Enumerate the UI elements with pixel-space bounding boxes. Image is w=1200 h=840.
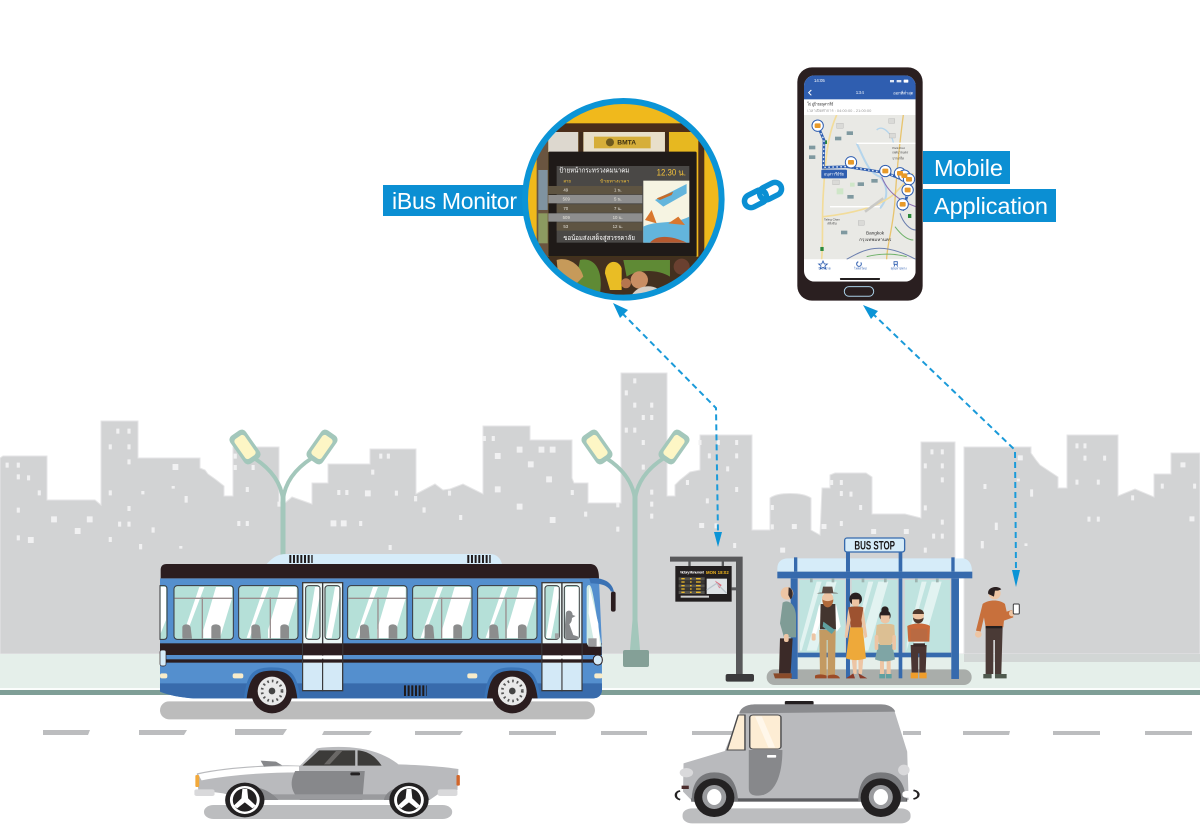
route map: Taling Chan [824, 218, 840, 222]
front door of bus [303, 583, 343, 691]
screen map [643, 181, 689, 243]
monitor screen: สาย [563, 178, 571, 183]
monitor screen: 12.30 น. [657, 168, 686, 178]
sign screen: Victory Monument [680, 570, 705, 574]
route map [804, 115, 916, 259]
street lamp 1 [227, 428, 340, 560]
bus lights and vent [160, 650, 603, 691]
route map: Bangkok [866, 231, 885, 236]
icon: chain link [742, 180, 784, 210]
car wheels [225, 783, 429, 817]
phone screen [804, 75, 916, 282]
passengers at bus stop [773, 587, 1019, 678]
street lamp 2 [579, 428, 692, 667]
person: man with phone [975, 587, 1019, 678]
app header: ไป อู่ป้ายอนุสาวรีย์ [807, 102, 834, 108]
BMTA plaque [594, 137, 651, 148]
monitor screen [548, 152, 697, 257]
people and plants below the monitor [547, 256, 698, 295]
monitor screen: ป้ายหน้ากระทรวงคมนาคม [559, 167, 629, 175]
monitor screen: 7 น. [614, 206, 622, 211]
app header: 134 [856, 90, 864, 96]
sign screen [675, 566, 732, 602]
tab bar: ป้ายโปรด [818, 266, 831, 270]
monitor screen: 509 [563, 197, 570, 202]
stop label: อนุสาวรีย์ชัย [824, 172, 844, 178]
home button [844, 287, 874, 296]
monitor screen: 1 น. [614, 188, 622, 193]
label: Mobile [923, 151, 1010, 184]
monitor screen: 53 [563, 224, 569, 229]
label: Application [923, 189, 1056, 222]
label: Mobile: Mobile [934, 155, 1003, 181]
route map: กรุงเทพมหานคร [859, 237, 892, 243]
bus location markers [812, 120, 915, 210]
arrow: monitor to stop sign [613, 303, 722, 547]
sign screen: 18:02 [718, 570, 729, 575]
monitor screen: 509 [563, 215, 570, 220]
route map: เทศบาลนคร [892, 150, 909, 154]
arrow: phone to user [863, 305, 1020, 587]
monitor screen: 12 น. [613, 224, 623, 229]
app header: เวลาเปิดทำการ : 04:00:00 - 21:00:00 [807, 108, 871, 113]
van [676, 701, 918, 823]
monitor screen: 49 [563, 188, 569, 193]
person: man with hat [812, 587, 841, 678]
smartphone [797, 67, 923, 301]
monitor screen: ขอน้อมส่งเสด็จสู่สวรรคาลัย [563, 233, 635, 242]
bus stop display sign [670, 557, 754, 682]
tab bar: สุดปลายทาง [891, 266, 907, 271]
tab bar [818, 261, 907, 280]
bus [160, 554, 616, 719]
app header: ออกที่ต่ำสุด [893, 91, 914, 97]
app header [804, 75, 916, 113]
person: woman in yellow skirt [845, 593, 867, 678]
bus wheels [244, 667, 540, 713]
skyline [0, 373, 1200, 654]
sign screen: MON [706, 570, 716, 575]
monitor screen: 70 [563, 206, 569, 211]
label: iBus Monitor: iBus Monitor [392, 188, 517, 214]
iBus monitor photo circle [520, 97, 727, 303]
app header: 14:05 [814, 78, 825, 83]
BMTA plaque: BMTA [617, 140, 636, 147]
route map: Park Kret [892, 146, 905, 150]
monitor screen: 10 น. [613, 215, 623, 220]
bus stop sign board [845, 538, 905, 553]
monitor screen: 5 น. [614, 197, 622, 202]
route map: ตลิ่งชัน [827, 222, 837, 226]
rear door and driver of bus [542, 583, 582, 691]
sidewalk [0, 654, 1200, 695]
road lane markings [43, 729, 1192, 735]
tab bar: โหลดใหม่ [854, 266, 867, 270]
label: Application: Application [934, 193, 1048, 219]
bus shelter [767, 552, 972, 685]
van wheels [694, 778, 901, 817]
person: woman with bun [875, 606, 896, 678]
car [194, 747, 460, 819]
monitor screen: ป้ายทางเวลา [600, 178, 630, 183]
stop label [821, 170, 847, 178]
person: man reading [907, 609, 930, 678]
route map: ปากเกร็ด [892, 154, 904, 160]
person: older man [773, 587, 796, 678]
bus stop sign board: BUS STOP [854, 539, 895, 553]
